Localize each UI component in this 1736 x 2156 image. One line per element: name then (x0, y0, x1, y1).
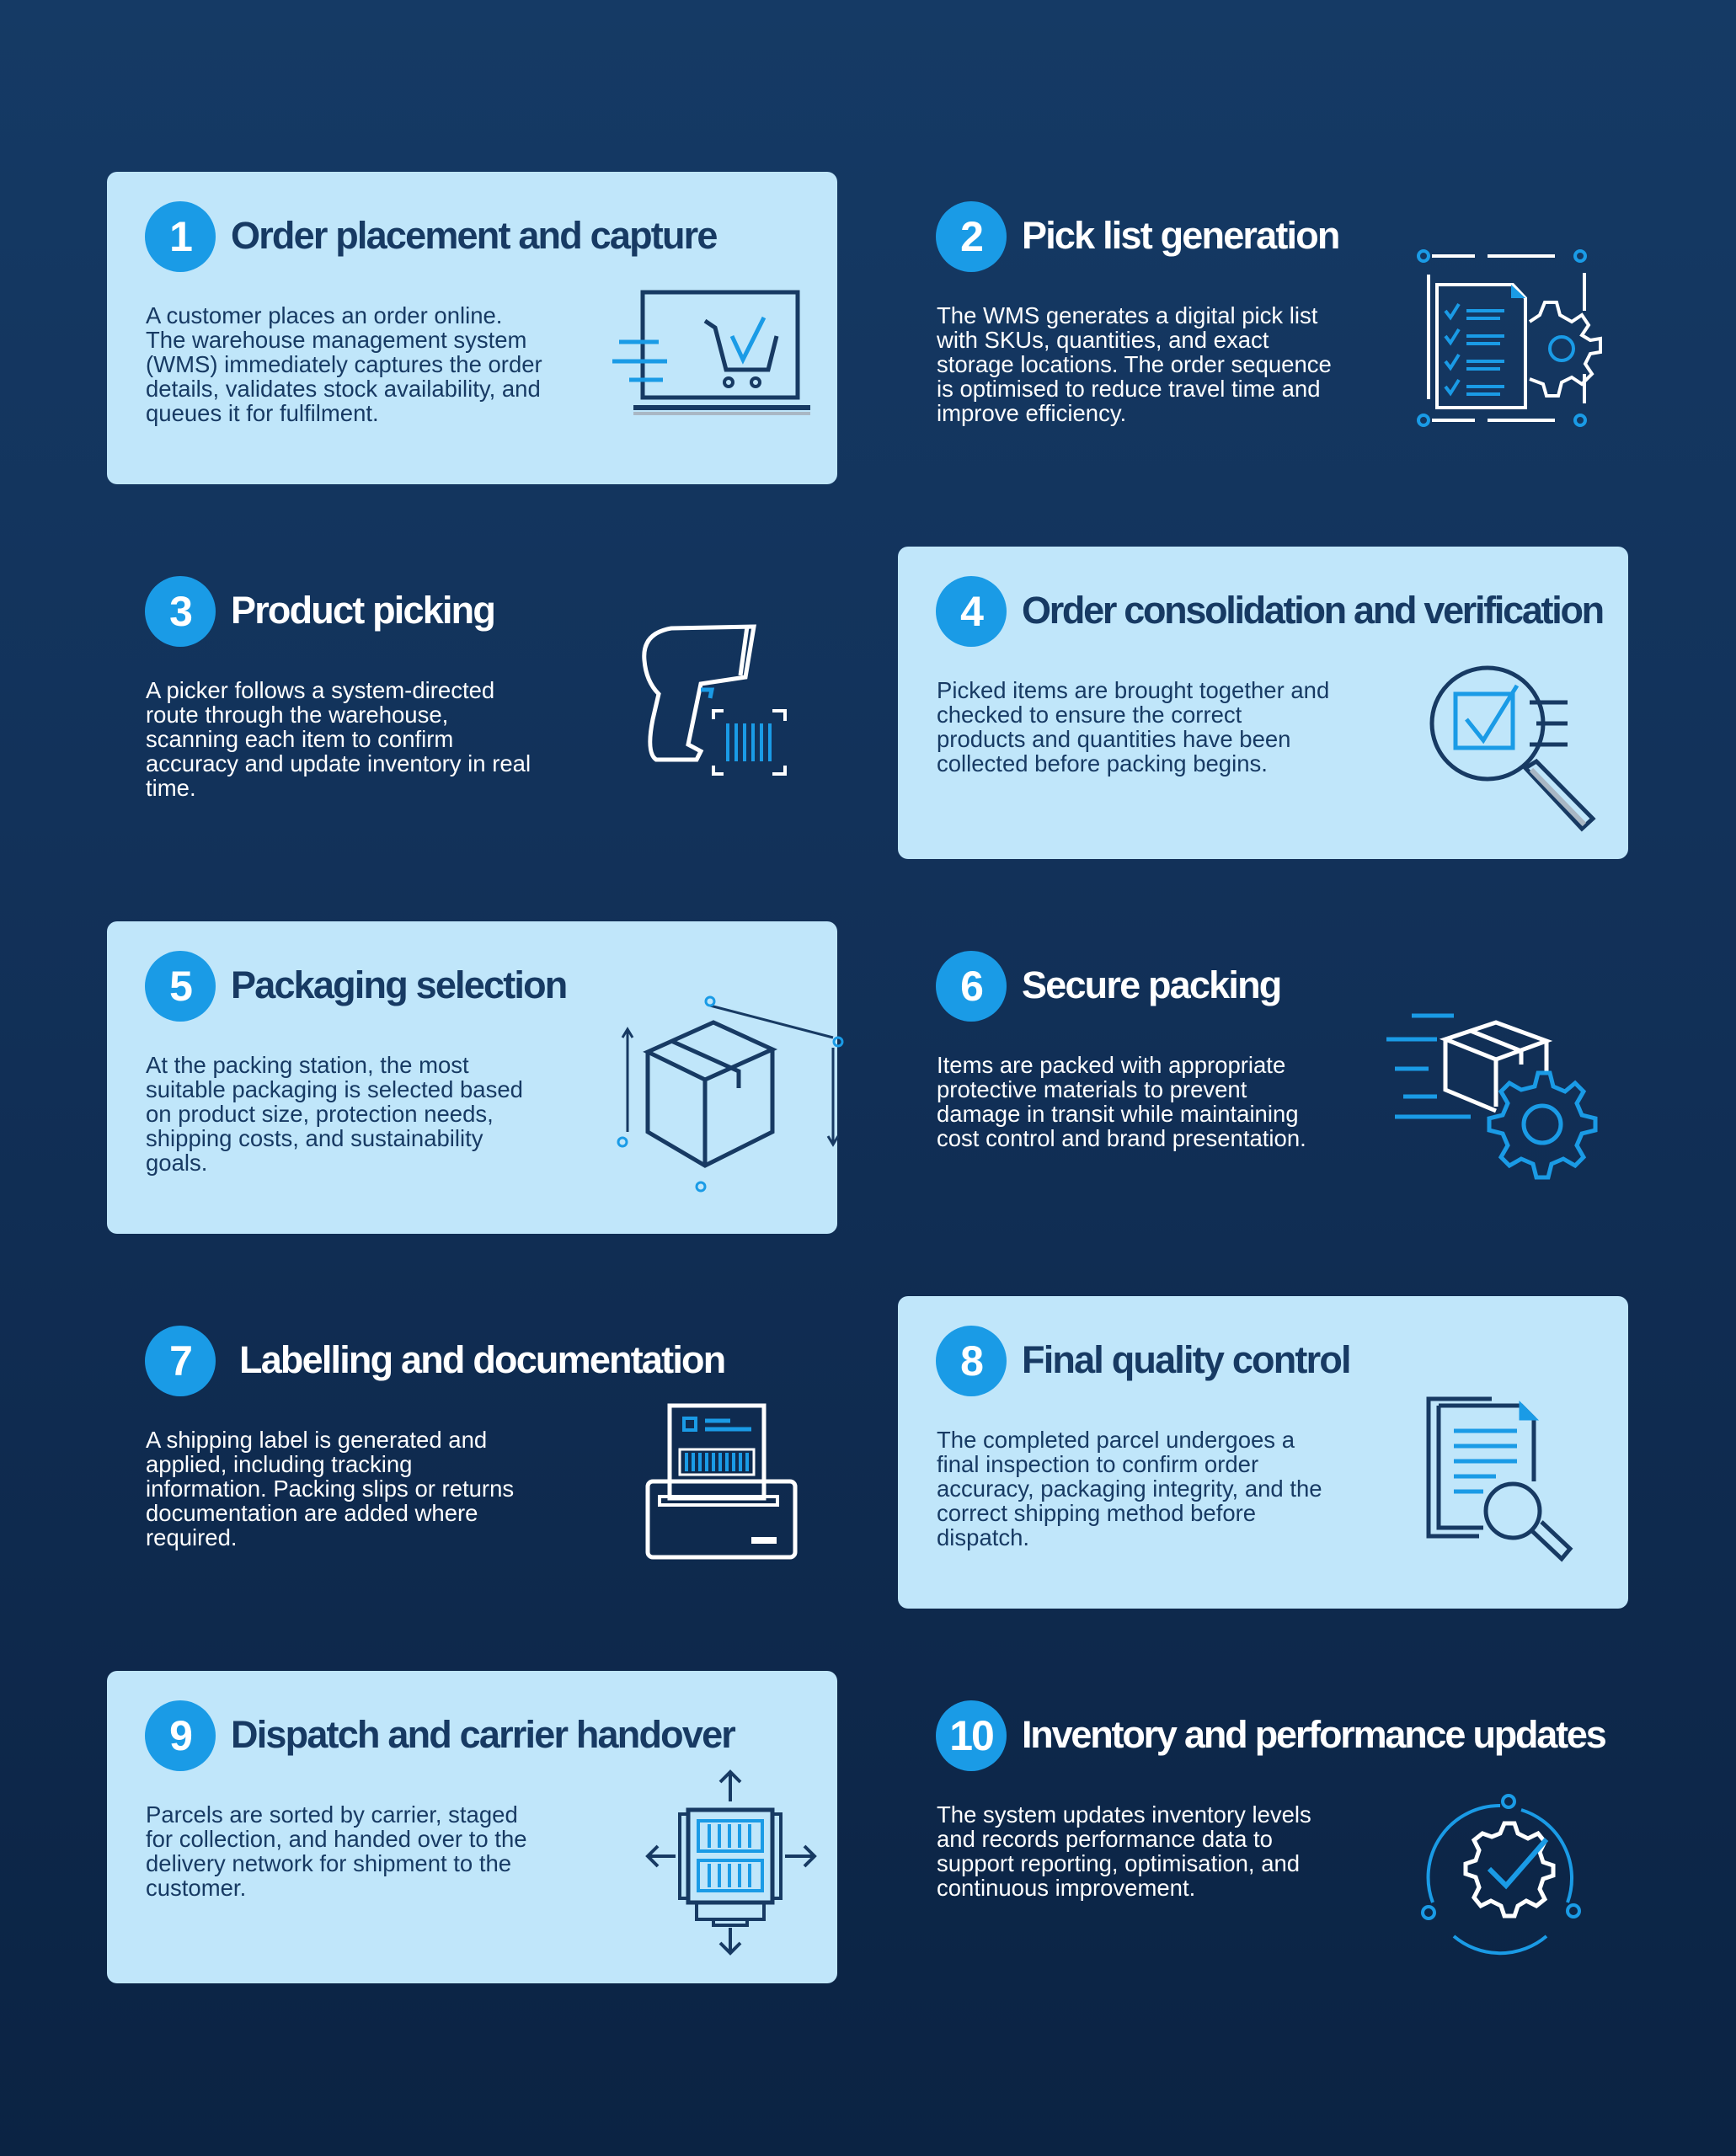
title 10: Inventory and performance updates (1022, 1713, 1605, 1756)
body 3: route through the warehouse, (146, 702, 448, 728)
body 4 (937, 677, 1329, 776)
body 1: details, validates stock availability, and (146, 376, 541, 402)
icon: container with arrows (645, 1769, 817, 1956)
number badge 10 (936, 1700, 1007, 1771)
number badge 5: 5 (169, 963, 191, 1010)
body 3 (146, 677, 531, 801)
body 1: queues it for fulfilment. (146, 400, 379, 426)
icon: magnifier check (1430, 665, 1595, 832)
card 10: inventory updates (936, 1700, 1605, 1956)
number badge 1: 1 (169, 213, 191, 260)
body 9: Parcels are sorted by carrier, staged (146, 1801, 518, 1828)
body 6 (937, 1052, 1306, 1151)
title 8: Final quality control (1022, 1338, 1350, 1381)
number badge 9 (145, 1700, 216, 1771)
icon: barcode scanner (642, 625, 787, 776)
body 10: support reporting, optimisation, and (937, 1850, 1300, 1876)
body 9: customer. (146, 1875, 246, 1901)
number badge 2: 2 (960, 213, 982, 260)
body 5 (146, 1052, 523, 1176)
number badge 9: 9 (169, 1712, 191, 1759)
body 9 (146, 1801, 527, 1901)
body 10: continuous improvement. (937, 1875, 1195, 1901)
body 5: goals. (146, 1150, 207, 1176)
body 3: A picker follows a system-directed (146, 677, 494, 703)
title 5: Packaging selection (231, 963, 566, 1006)
body 8: accuracy, packaging integrity, and the (937, 1476, 1322, 1502)
body 5: At the packing station, the most (146, 1052, 469, 1078)
card 5: packaging selection (107, 921, 837, 1234)
number badge 1 (145, 201, 216, 272)
icon: pick list with gear (1417, 249, 1602, 427)
title 9: Dispatch and carrier handover (231, 1713, 734, 1756)
card 9: dispatch (107, 1671, 837, 1983)
body 2 (937, 302, 1332, 426)
body 5: shipping costs, and sustainability (146, 1125, 483, 1151)
body 1: A customer places an order online. (146, 302, 502, 328)
body 6: Items are packed with appropriate (937, 1052, 1285, 1078)
icon: laptop cart (612, 290, 810, 415)
body 2: storage locations. The order sequence (937, 351, 1332, 377)
body 9: delivery network for shipment to the (146, 1850, 511, 1876)
card 1: order placement (107, 172, 837, 484)
body 7: applied, including tracking (146, 1451, 412, 1477)
body 8: dispatch. (937, 1524, 1029, 1550)
body 3: scanning each item to confirm (146, 726, 453, 752)
body 7: documentation are added where (146, 1500, 478, 1526)
icon: box and gear (1386, 1014, 1597, 1179)
card 3: product picking (145, 576, 787, 801)
body 2: with SKUs, quantities, and exact (937, 327, 1269, 353)
number badge 3: 3 (169, 588, 191, 635)
body 4: checked to ensure the correct (937, 702, 1242, 728)
body 6: damage in transit while maintaining (937, 1101, 1299, 1127)
icon: document magnifier (1427, 1396, 1573, 1562)
card 2: pick list generation (936, 201, 1602, 427)
body 8: correct shipping method before (937, 1500, 1256, 1526)
body 3: time. (146, 775, 196, 801)
body 2: improve efficiency. (937, 400, 1126, 426)
body 5: suitable packaging is selected based (146, 1076, 523, 1102)
body 8: final inspection to confirm order (937, 1451, 1258, 1477)
body 10: and records performance data to (937, 1826, 1273, 1852)
icon: label printer (645, 1403, 797, 1560)
body 2: The WMS generates a digital pick list (937, 302, 1317, 328)
body 4: collected before packing begins. (937, 750, 1268, 776)
card 6: secure packing (936, 951, 1597, 1179)
body 5: on product size, protection needs, (146, 1101, 494, 1127)
body 1: (WMS) immediately captures the order (146, 351, 542, 377)
number badge 8: 8 (960, 1337, 982, 1385)
body 2: is optimised to reduce travel time and (937, 376, 1321, 402)
body 8: The completed parcel undergoes a (937, 1427, 1295, 1453)
body 10 (937, 1801, 1311, 1901)
number badge 6: 6 (960, 963, 982, 1010)
number badge 3 (145, 576, 216, 647)
number badge 6 (936, 951, 1007, 1022)
body 1 (146, 302, 542, 426)
body 9: for collection, and handed over to the (146, 1826, 527, 1852)
title 2: Pick list generation (1022, 214, 1339, 257)
icon: box with dimensions (617, 995, 844, 1193)
number badge 8 (936, 1326, 1007, 1396)
title 3: Product picking (231, 589, 494, 632)
icon: cycle gear check (1421, 1794, 1581, 1956)
body 7: required. (146, 1524, 238, 1550)
body 7 (146, 1427, 514, 1550)
body 6: protective materials to prevent (937, 1076, 1247, 1102)
number badge 10: 10 (949, 1712, 993, 1759)
number badge 7 (145, 1326, 216, 1396)
number badge 5 (145, 951, 216, 1022)
body 4: Picked items are brought together and (937, 677, 1329, 703)
body 7: A shipping label is generated and (146, 1427, 487, 1453)
card 8: final quality control (898, 1296, 1628, 1609)
body 8 (937, 1427, 1322, 1550)
body 10: The system updates inventory levels (937, 1801, 1311, 1828)
card 4: consolidation and verification (898, 547, 1628, 859)
number badge 4 (936, 576, 1007, 647)
card 7: labelling (145, 1326, 797, 1560)
number badge 4: 4 (960, 588, 982, 635)
title 6: Secure packing (1022, 963, 1280, 1006)
title 7: Labelling and documentation (239, 1338, 724, 1381)
body 1: The warehouse management system (146, 327, 526, 353)
number badge 7: 7 (169, 1337, 191, 1385)
number badge 2 (936, 201, 1007, 272)
body 7: information. Packing slips or returns (146, 1476, 514, 1502)
title 1: Order placement and capture (231, 214, 717, 257)
body 4: products and quantities have been (937, 726, 1290, 752)
body 6: cost control and brand presentation. (937, 1125, 1306, 1151)
body 3: accuracy and update inventory in real (146, 750, 531, 776)
title 4: Order consolidation and verification (1022, 589, 1603, 632)
